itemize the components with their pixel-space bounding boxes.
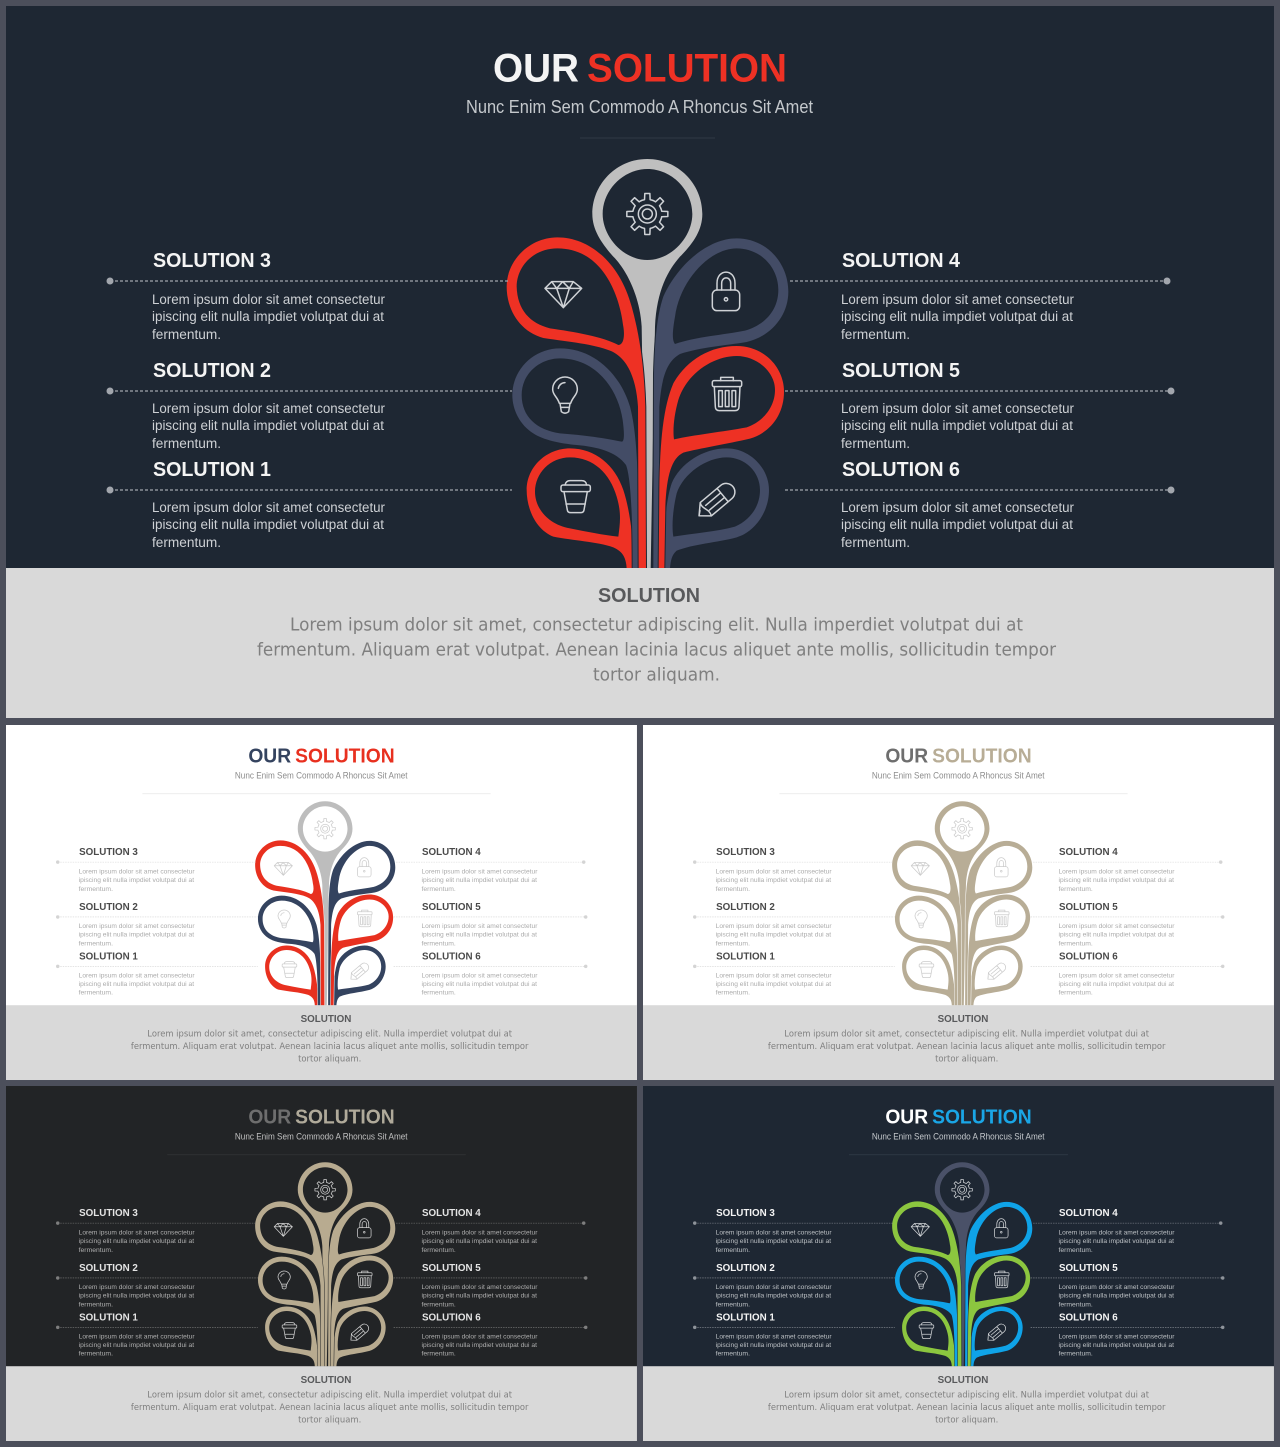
solution 2: fermentum. (716, 1301, 750, 1308)
solution 5: fermentum. (1058, 940, 1093, 947)
subtitle: Nunc Enim Sem Commodo A Rhoncus Sit Amet (872, 770, 1045, 780)
solution 1: SOLUTION 1 (153, 459, 271, 481)
solution 3: ipiscing elit nulla impdiet volutpat dui at (79, 1238, 194, 1245)
solution 2: SOLUTION 2 (716, 1263, 775, 1274)
subtitle: Nunc Enim Sem Commodo A Rhoncus Sit Amet (466, 97, 813, 117)
title: SOLUTION (932, 1107, 1032, 1129)
solution 3: ipiscing elit nulla impdiet volutpat dui at (152, 309, 384, 324)
solution 5: Lorem ipsum dolor sit amet consectetur (421, 923, 538, 930)
solution 5: SOLUTION 5 (1059, 1263, 1118, 1274)
solution 5: SOLUTION 5 (422, 1263, 481, 1274)
solution 6: ipiscing elit nulla impdiet volutpat dui at (1058, 1342, 1174, 1349)
solution 1: Lorem ipsum dolor sit amet consectetur (79, 972, 195, 979)
title (885, 746, 1032, 768)
solution 6: fermentum. (841, 535, 910, 550)
solution 4: Lorem ipsum dolor sit amet consectetur (1058, 1230, 1175, 1237)
solution 5: fermentum. (421, 940, 456, 947)
solution 5: ipiscing elit nulla impdiet volutpat dui at (421, 931, 537, 938)
bottom summary panel: tortor aliquam. (935, 1415, 998, 1425)
solution 2: SOLUTION 2 (79, 902, 138, 913)
solution 2 (56, 1263, 258, 1308)
solution 6 (394, 1312, 587, 1358)
solution 2: Lorem ipsum dolor sit amet consectetur (716, 923, 832, 930)
solution 4: fermentum. (421, 1247, 456, 1254)
solution 6: Lorem ipsum dolor sit amet consectetur (421, 972, 538, 979)
solution 1: Lorem ipsum dolor sit amet consectetur (716, 972, 832, 979)
solution 5: fermentum. (841, 436, 910, 451)
bottom summary panel: fermentum. Aliquam erat volutpat. Aenean lacinia lacus aliquet ante mollis, sollicitudin tempor (768, 1042, 1166, 1052)
solution 5: fermentum. (1058, 1301, 1093, 1308)
solution 1: SOLUTION 1 (716, 1312, 775, 1323)
bottom summary panel: tortor aliquam. (298, 1054, 361, 1064)
panel: white slide with red and navy tree (6, 725, 637, 1080)
title: OUR (885, 746, 928, 768)
solution 4: ipiscing elit nulla impdiet volutpat dui at (421, 1238, 537, 1245)
bottom summary panel: fermentum. Aliquam erat volutpat. Aenean lacinia lacus aliquet ante mollis, sollicitudin tempor (768, 1403, 1166, 1413)
bottom summary panel (643, 1366, 1274, 1441)
solution 4: Lorem ipsum dolor sit amet consectetur (1058, 869, 1175, 876)
solution 5 (1031, 1263, 1224, 1308)
solution 6 (1031, 951, 1224, 997)
solution 5 (394, 1263, 587, 1308)
tree diagram (892, 801, 1032, 1005)
solution 4: fermentum. (421, 886, 456, 893)
tree diagram (507, 159, 788, 568)
panel: charcoal slide with beige tree (6, 1086, 637, 1441)
solution 1: SOLUTION 1 (79, 1312, 138, 1323)
solution 5: ipiscing elit nulla impdiet volutpat dui at (1058, 931, 1174, 938)
solution 3: Lorem ipsum dolor sit amet consectetur (152, 292, 385, 307)
subtitle: Nunc Enim Sem Commodo A Rhoncus Sit Amet (872, 1131, 1045, 1141)
solution 4: SOLUTION 4 (1059, 847, 1118, 858)
solution 1: SOLUTION 1 (716, 951, 775, 962)
solution 4: SOLUTION 4 (1059, 1208, 1118, 1219)
solution 6: Lorem ipsum dolor sit amet consectetur (1058, 1333, 1175, 1340)
solution 6: fermentum. (1058, 1351, 1093, 1358)
solution 5: ipiscing elit nulla impdiet volutpat dui at (841, 418, 1073, 433)
solution 6: fermentum. (1058, 990, 1093, 997)
solution 2: Lorem ipsum dolor sit amet consectetur (152, 401, 385, 416)
bottom summary panel (6, 568, 1274, 718)
bottom summary panel: SOLUTION (938, 1375, 988, 1386)
solution 1 (106, 459, 512, 550)
solution 3: fermentum. (79, 1247, 113, 1254)
solution 2 (693, 902, 895, 947)
solution 6: Lorem ipsum dolor sit amet consectetur (1058, 972, 1175, 979)
solution 1: fermentum. (79, 990, 113, 997)
title: OUR (493, 46, 579, 90)
solution 1 (693, 951, 895, 997)
bottom summary panel: tortor aliquam. (935, 1054, 998, 1064)
solution 3: SOLUTION 3 (716, 847, 775, 858)
bottom summary panel: Lorem ipsum dolor sit amet, consectetur adipiscing elit. Nulla imperdiet volutpat dui at (147, 1390, 513, 1400)
solution 4: Lorem ipsum dolor sit amet consectetur (421, 869, 538, 876)
solution 4: SOLUTION 4 (842, 250, 961, 272)
title: SOLUTION (295, 746, 395, 768)
solution 6: ipiscing elit nulla impdiet volutpat dui at (421, 1342, 537, 1349)
solution 3 (56, 847, 256, 893)
solution 1 (56, 1312, 258, 1358)
solution 3: ipiscing elit nulla impdiet volutpat dui at (716, 1238, 831, 1245)
solution 1: fermentum. (79, 1351, 113, 1358)
solution 2: Lorem ipsum dolor sit amet consectetur (79, 1284, 195, 1291)
solution 3: Lorem ipsum dolor sit amet consectetur (79, 1230, 195, 1237)
bottom summary panel: SOLUTION (938, 1014, 988, 1025)
solution 4: ipiscing elit nulla impdiet volutpat dui at (841, 309, 1073, 324)
title: SOLUTION (295, 1107, 395, 1129)
solution 3: Lorem ipsum dolor sit amet consectetur (79, 869, 195, 876)
solution 6: ipiscing elit nulla impdiet volutpat dui at (841, 517, 1073, 532)
bottom summary panel: SOLUTION (598, 585, 700, 607)
solution 3: Lorem ipsum dolor sit amet consectetur (716, 869, 832, 876)
bottom summary panel: Lorem ipsum dolor sit amet, consectetur adipiscing elit. Nulla imperdiet volutpat dui at (147, 1029, 513, 1039)
solution 3 (693, 1208, 893, 1254)
solution 2: ipiscing elit nulla impdiet volutpat dui at (716, 1292, 831, 1299)
solution 3: SOLUTION 3 (716, 1208, 775, 1219)
panel: main dark slide (6, 6, 1274, 718)
bottom summary panel: Lorem ipsum dolor sit amet, consectetur adipiscing elit. Nulla imperdiet volutpat dui at (784, 1029, 1150, 1039)
solution 3: SOLUTION 3 (153, 250, 271, 272)
tree diagram (255, 1162, 395, 1366)
solution 5 (394, 902, 587, 947)
solution 4 (790, 250, 1170, 342)
solution 3: fermentum. (79, 886, 113, 893)
bottom summary panel: SOLUTION (301, 1014, 351, 1025)
solution 1: ipiscing elit nulla impdiet volutpat dui at (716, 981, 831, 988)
solution 2: SOLUTION 2 (153, 360, 271, 382)
title: SOLUTION (932, 746, 1032, 768)
solution 5: SOLUTION 5 (1059, 902, 1118, 913)
solution 6: ipiscing elit nulla impdiet volutpat dui at (421, 981, 537, 988)
solution 1: Lorem ipsum dolor sit amet consectetur (79, 1333, 195, 1340)
title (248, 746, 395, 768)
solution 4: ipiscing elit nulla impdiet volutpat dui at (1058, 877, 1174, 884)
bottom summary panel (6, 1366, 637, 1441)
title: SOLUTION (587, 46, 787, 90)
solution 2: SOLUTION 2 (79, 1263, 138, 1274)
solution 2: ipiscing elit nulla impdiet volutpat dui at (152, 418, 384, 433)
solution 5: Lorem ipsum dolor sit amet consectetur (1058, 1284, 1175, 1291)
solution 6: SOLUTION 6 (422, 951, 481, 962)
solution 6 (394, 951, 587, 997)
bottom summary panel: tortor aliquam. (593, 666, 720, 686)
bottom summary panel: fermentum. Aliquam erat volutpat. Aenean lacinia lacus aliquet ante mollis, sollicitudin tempor (257, 640, 1057, 660)
solution 2: fermentum. (152, 436, 221, 451)
solution 3: SOLUTION 3 (79, 847, 138, 858)
solution 1: ipiscing elit nulla impdiet volutpat dui at (716, 1342, 831, 1349)
bottom summary panel: fermentum. Aliquam erat volutpat. Aenean lacinia lacus aliquet ante mollis, sollicitudin tempor (131, 1042, 529, 1052)
solution 5: SOLUTION 5 (842, 360, 960, 382)
solution 2: ipiscing elit nulla impdiet volutpat dui at (716, 931, 831, 938)
subtitle: Nunc Enim Sem Commodo A Rhoncus Sit Amet (235, 1131, 408, 1141)
solution 6: SOLUTION 6 (1059, 951, 1118, 962)
bottom summary panel: Lorem ipsum dolor sit amet, consectetur adipiscing elit. Nulla imperdiet volutpat dui at (290, 616, 1023, 636)
solution 6: ipiscing elit nulla impdiet volutpat dui at (1058, 981, 1174, 988)
solution 4: fermentum. (1058, 886, 1093, 893)
solution 4 (396, 1208, 585, 1254)
solution 5: Lorem ipsum dolor sit amet consectetur (421, 1284, 538, 1291)
solution 4: ipiscing elit nulla impdiet volutpat dui at (1058, 1238, 1174, 1245)
solution 1: ipiscing elit nulla impdiet volutpat dui at (79, 1342, 194, 1349)
solution 5: ipiscing elit nulla impdiet volutpat dui at (421, 1292, 537, 1299)
solution 6: Lorem ipsum dolor sit amet consectetur (841, 500, 1074, 515)
solution 6: fermentum. (421, 990, 456, 997)
solution 6: fermentum. (421, 1351, 456, 1358)
tree diagram (255, 801, 395, 1005)
solution 2: fermentum. (79, 940, 113, 947)
solution 5: Lorem ipsum dolor sit amet consectetur (1058, 923, 1175, 930)
solution 1: fermentum. (152, 535, 221, 550)
solution 2: ipiscing elit nulla impdiet volutpat dui at (79, 1292, 194, 1299)
solution 2: fermentum. (716, 940, 750, 947)
solution 3 (56, 1208, 256, 1254)
solution 6: SOLUTION 6 (1059, 1312, 1118, 1323)
title (493, 46, 787, 90)
bottom summary panel (6, 1005, 637, 1080)
solution 4: SOLUTION 4 (422, 1208, 481, 1219)
solution 6: SOLUTION 6 (842, 459, 960, 481)
solution 4 (1033, 1208, 1222, 1254)
solution 3: Lorem ipsum dolor sit amet consectetur (716, 1230, 832, 1237)
bottom summary panel: fermentum. Aliquam erat volutpat. Aenean lacinia lacus aliquet ante mollis, sollicitudin tempor (131, 1403, 529, 1413)
solution 5: ipiscing elit nulla impdiet volutpat dui at (1058, 1292, 1174, 1299)
bottom summary panel (643, 1005, 1274, 1080)
solution 3: fermentum. (152, 327, 221, 342)
tree diagram (892, 1162, 1032, 1366)
solution 4: Lorem ipsum dolor sit amet consectetur (841, 292, 1074, 307)
solution 5: Lorem ipsum dolor sit amet consectetur (841, 401, 1074, 416)
title: OUR (248, 746, 291, 768)
solution 4: Lorem ipsum dolor sit amet consectetur (421, 1230, 538, 1237)
solution 4 (1033, 847, 1222, 893)
solution 1: fermentum. (716, 990, 750, 997)
solution 2: Lorem ipsum dolor sit amet consectetur (716, 1284, 832, 1291)
solution 3: fermentum. (716, 1247, 750, 1254)
solution 1: ipiscing elit nulla impdiet volutpat dui at (152, 517, 384, 532)
subtitle: Nunc Enim Sem Commodo A Rhoncus Sit Amet (235, 770, 408, 780)
solution 3 (693, 847, 893, 893)
solution 5 (1031, 902, 1224, 947)
bottom summary panel: SOLUTION (301, 1375, 351, 1386)
solution 1: Lorem ipsum dolor sit amet consectetur (152, 500, 385, 515)
solution 6 (785, 459, 1174, 550)
solution 6 (1031, 1312, 1224, 1358)
solution 1 (56, 951, 258, 997)
solution 3: SOLUTION 3 (79, 1208, 138, 1219)
solution 2: SOLUTION 2 (716, 902, 775, 913)
solution 6: SOLUTION 6 (422, 1312, 481, 1323)
solution 4: ipiscing elit nulla impdiet volutpat dui at (421, 877, 537, 884)
panel: white slide with beige tree (643, 725, 1274, 1080)
solution 2 (106, 360, 512, 451)
bottom summary panel: tortor aliquam. (298, 1415, 361, 1425)
solution 1: Lorem ipsum dolor sit amet consectetur (716, 1333, 832, 1340)
solution 2: Lorem ipsum dolor sit amet consectetur (79, 923, 195, 930)
solution 5: fermentum. (421, 1301, 456, 1308)
solution 2: ipiscing elit nulla impdiet volutpat dui at (79, 931, 194, 938)
solution 4 (396, 847, 585, 893)
solution 1 (693, 1312, 895, 1358)
solution 2 (693, 1263, 895, 1308)
title (248, 1107, 395, 1129)
solution 3: ipiscing elit nulla impdiet volutpat dui at (716, 877, 831, 884)
solution 3 (106, 250, 508, 342)
solution 2 (56, 902, 258, 947)
solution 3: fermentum. (716, 886, 750, 893)
solution 1: ipiscing elit nulla impdiet volutpat dui at (79, 981, 194, 988)
solution 4: SOLUTION 4 (422, 847, 481, 858)
solution 5 (785, 360, 1174, 451)
bottom summary panel: Lorem ipsum dolor sit amet, consectetur adipiscing elit. Nulla imperdiet volutpat dui at (784, 1390, 1150, 1400)
solution 1: fermentum. (716, 1351, 750, 1358)
solution 4: fermentum. (841, 327, 910, 342)
solution 5: SOLUTION 5 (422, 902, 481, 913)
solution 1: SOLUTION 1 (79, 951, 138, 962)
solution 2: fermentum. (79, 1301, 113, 1308)
solution 6: Lorem ipsum dolor sit amet consectetur (421, 1333, 538, 1340)
solution 4: fermentum. (1058, 1247, 1093, 1254)
title: OUR (248, 1107, 291, 1129)
title: OUR (885, 1107, 928, 1129)
title (885, 1107, 1032, 1129)
solution 3: ipiscing elit nulla impdiet volutpat dui at (79, 877, 194, 884)
panel: navy slide with green and blue tree (643, 1086, 1274, 1441)
